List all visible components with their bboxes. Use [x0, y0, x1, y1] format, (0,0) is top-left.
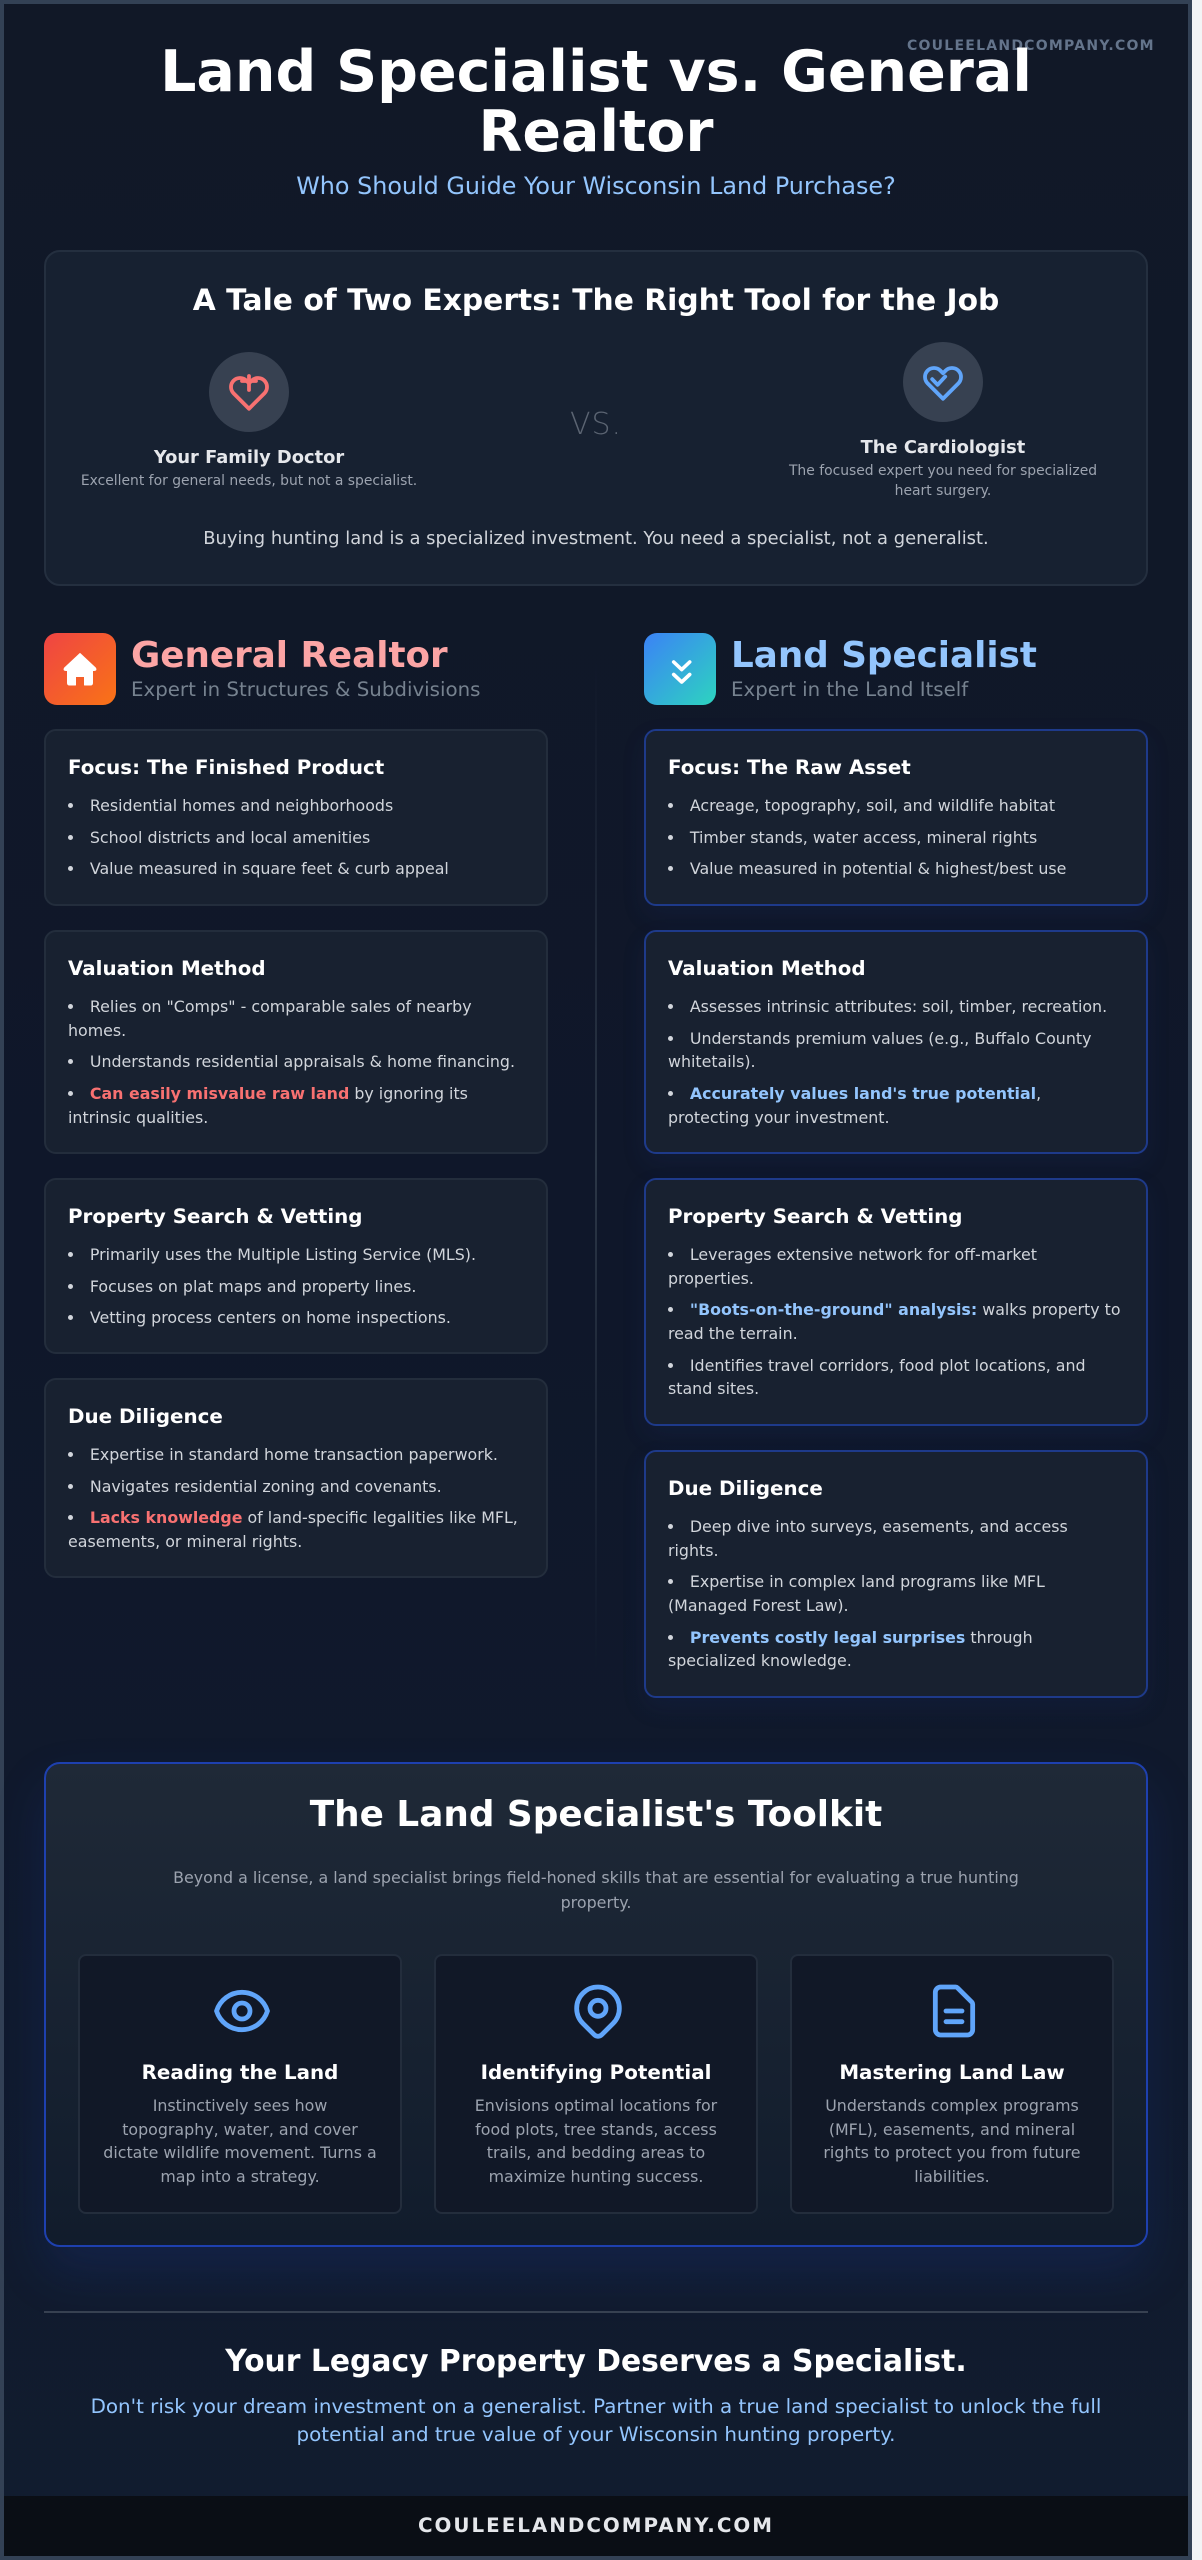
card: realtor focus — [44, 729, 548, 906]
card: realtor search: Focuses on plat maps and property lines. — [90, 1277, 416, 1296]
tool card: mastering land law — [790, 1954, 1114, 2214]
tool card: identifying potential — [434, 1954, 758, 2214]
title — [160, 39, 1032, 164]
card: specialist focus: Timber stands, water access, mineral rights — [690, 828, 1037, 847]
column header: land specialist — [644, 633, 1037, 705]
icon: double chevron — [644, 633, 716, 705]
toolkit intro — [173, 1868, 1019, 1912]
doctor description: Excellent for general needs, but not a specialist. — [81, 473, 417, 489]
card: specialist search: Property Search & Vetting — [668, 1205, 963, 1228]
card: realtor due diligence — [44, 1378, 548, 1578]
card: realtor due diligence: Lacks knowledge of land-specific legalities like MFL, easements, or mineral rights. — [68, 1508, 518, 1551]
icon: eye — [214, 1990, 270, 2032]
card: specialist valuation: Assesses intrinsic attributes: soil, timber, recreation. — [690, 997, 1107, 1016]
panel: the land specialist's toolkit — [44, 1762, 1148, 2247]
card: realtor search — [44, 1178, 548, 1354]
icon: heart with check — [903, 342, 983, 422]
card: specialist due diligence: Prevents costly legal surprises through specialized knowledge. — [668, 1628, 1033, 1670]
card: specialist focus: Focus: The Raw Asset — [668, 756, 911, 779]
icon: map pin — [574, 1984, 622, 2039]
card: realtor valuation — [44, 930, 548, 1154]
cardiologist description: The focused expert you need for specialized heart surgery. — [789, 463, 1097, 499]
card: realtor focus: Residential homes and neighborhoods — [90, 796, 393, 815]
card: realtor valuation: Understands residential appraisals & home financing. — [90, 1052, 515, 1071]
card: specialist focus — [644, 729, 1148, 906]
card: specialist due diligence: Deep dive into surveys, easements, and access — [690, 1517, 1068, 1536]
card: specialist valuation: Understands premium values (e.g., Buffalo County whitetails). — [668, 1029, 1091, 1071]
icon: heart with plus — [209, 352, 289, 432]
tool description: trails, and bedding areas to — [487, 2143, 705, 2162]
vs label: VS. — [570, 407, 622, 442]
closing text — [91, 2395, 1101, 2446]
column header: general realtor — [44, 633, 480, 705]
card: specialist valuation: Valuation Method — [668, 957, 866, 980]
card: specialist focus: Value measured in potential & highest/best use — [690, 859, 1066, 878]
panel takeaway: Buying hunting land is a specialized investment. You need a specialist, not a generalist. — [203, 528, 989, 549]
expert: family doctor — [81, 352, 417, 489]
card: realtor due diligence: Expertise in standard home transaction paperwork. — [90, 1445, 498, 1464]
column subtitle: Expert in Structures & Subdivisions — [131, 678, 480, 701]
tool description: food plots, tree stands, access — [475, 2120, 717, 2139]
card: specialist due diligence — [644, 1450, 1148, 1698]
closing text: potential and true value of your Wisconsin hunting property. — [297, 2423, 895, 2446]
card: specialist search: read the terrain. — [668, 1324, 798, 1343]
cardiologist name: The Cardiologist — [861, 437, 1025, 458]
icon: document — [932, 1984, 976, 2038]
icon: house — [44, 633, 116, 705]
card: realtor search: Vetting process centers on home inspections. — [90, 1308, 451, 1327]
tool description: (MFL), easements, and mineral — [829, 2120, 1075, 2139]
card: realtor due diligence: Navigates residential zoning and covenants. — [90, 1477, 442, 1496]
card: specialist search: Identifies travel corridors, food plot locations, and stand sites. — [668, 1356, 1086, 1398]
card: specialist valuation: Accurately values land's true potential, protecting your investment. — [668, 1084, 1041, 1127]
card: realtor valuation: Can easily misvalue raw land by ignoring its intrinsic qualities. — [68, 1084, 468, 1127]
tool description: topography, water, and cover — [122, 2120, 358, 2139]
card: realtor focus: Value measured in square feet & curb appeal — [90, 859, 449, 878]
tool title: Identifying Potential — [481, 2061, 711, 2084]
closing section — [91, 2344, 1101, 2446]
doctor name: Your Family Doctor — [154, 447, 344, 468]
closing text: Don't risk your dream investment on a generalist. Partner with a true land specialist to unlock the full — [91, 2395, 1101, 2418]
card: specialist due diligence: rights. — [668, 1541, 719, 1560]
card: specialist search — [644, 1178, 1148, 1426]
column subtitle: Expert in the Land Itself — [731, 678, 968, 701]
footer bar: COULEELANDCOMPANY.COM — [418, 2514, 774, 2537]
tool description — [103, 2096, 377, 2186]
card: realtor search: Property Search & Vetting — [68, 1205, 363, 1228]
card: realtor valuation: Relies on "Comps" - comparable sales of nearby homes. — [68, 997, 472, 1040]
tool description: liabilities. — [914, 2167, 990, 2186]
tool description — [475, 2096, 718, 2186]
tool description: Understands complex programs — [825, 2096, 1079, 2115]
title: Land Specialist vs. General — [160, 39, 1032, 105]
card: realtor due diligence: Due Diligence — [68, 1405, 223, 1428]
tool description: Instinctively sees how — [153, 2096, 327, 2115]
footer bar — [4, 2496, 1188, 2556]
divider between columns — [595, 660, 597, 1670]
expert: cardiologist — [788, 342, 1097, 499]
card: specialist valuation — [644, 930, 1148, 1154]
tool description: Envisions optimal locations for — [475, 2096, 717, 2115]
closing heading: Your Legacy Property Deserves a Specialist. — [225, 2344, 967, 2379]
subtitle: Who Should Guide Your Wisconsin Land Purchase? — [296, 172, 896, 200]
tool title: Mastering Land Law — [839, 2061, 1065, 2084]
card: specialist focus: Acreage, topography, soil, and wildlife habitat — [690, 796, 1055, 815]
watermark: COULEELANDCOMPANY.COM — [907, 38, 1155, 54]
card: realtor focus: School districts and local amenities — [90, 828, 370, 847]
panel heading: A Tale of Two Experts: The Right Tool for the Job — [193, 283, 999, 318]
card: specialist due diligence: Due Diligence — [668, 1477, 823, 1500]
tool description: map into a strategy. — [160, 2167, 320, 2186]
card: specialist search: Leverages extensive network for off-market properties. — [668, 1245, 1037, 1288]
card: realtor search: Primarily uses the Multiple Listing Service (MLS). — [90, 1245, 476, 1264]
toolkit heading: The Land Specialist's Toolkit — [310, 1794, 882, 1835]
card: specialist search: "Boots-on-the-ground" analysis: walks property to — [690, 1300, 1121, 1319]
tool description: dictate wildlife movement. Turns a — [103, 2143, 377, 2162]
tool title: Reading the Land — [142, 2061, 338, 2084]
column title: General Realtor — [131, 635, 448, 676]
card: realtor valuation: Valuation Method — [68, 957, 266, 980]
column title: Land Specialist — [731, 635, 1037, 676]
tool card: reading the land — [78, 1954, 402, 2214]
toolkit intro: property. — [561, 1893, 631, 1912]
tool description: maximize hunting success. — [489, 2167, 703, 2186]
title: Realtor — [478, 98, 714, 164]
card: specialist due diligence: Expertise in complex land programs like MFL (Managed Forest Law). — [668, 1572, 1045, 1615]
card: realtor focus: Focus: The Finished Product — [68, 756, 384, 779]
toolkit intro: Beyond a license, a land specialist brings field-honed skills that are essential for evaluating a true hunting — [173, 1868, 1019, 1887]
tool description: rights to protect you from future — [823, 2143, 1081, 2162]
tool description — [823, 2096, 1081, 2186]
panel: a tale of two experts — [44, 250, 1148, 586]
